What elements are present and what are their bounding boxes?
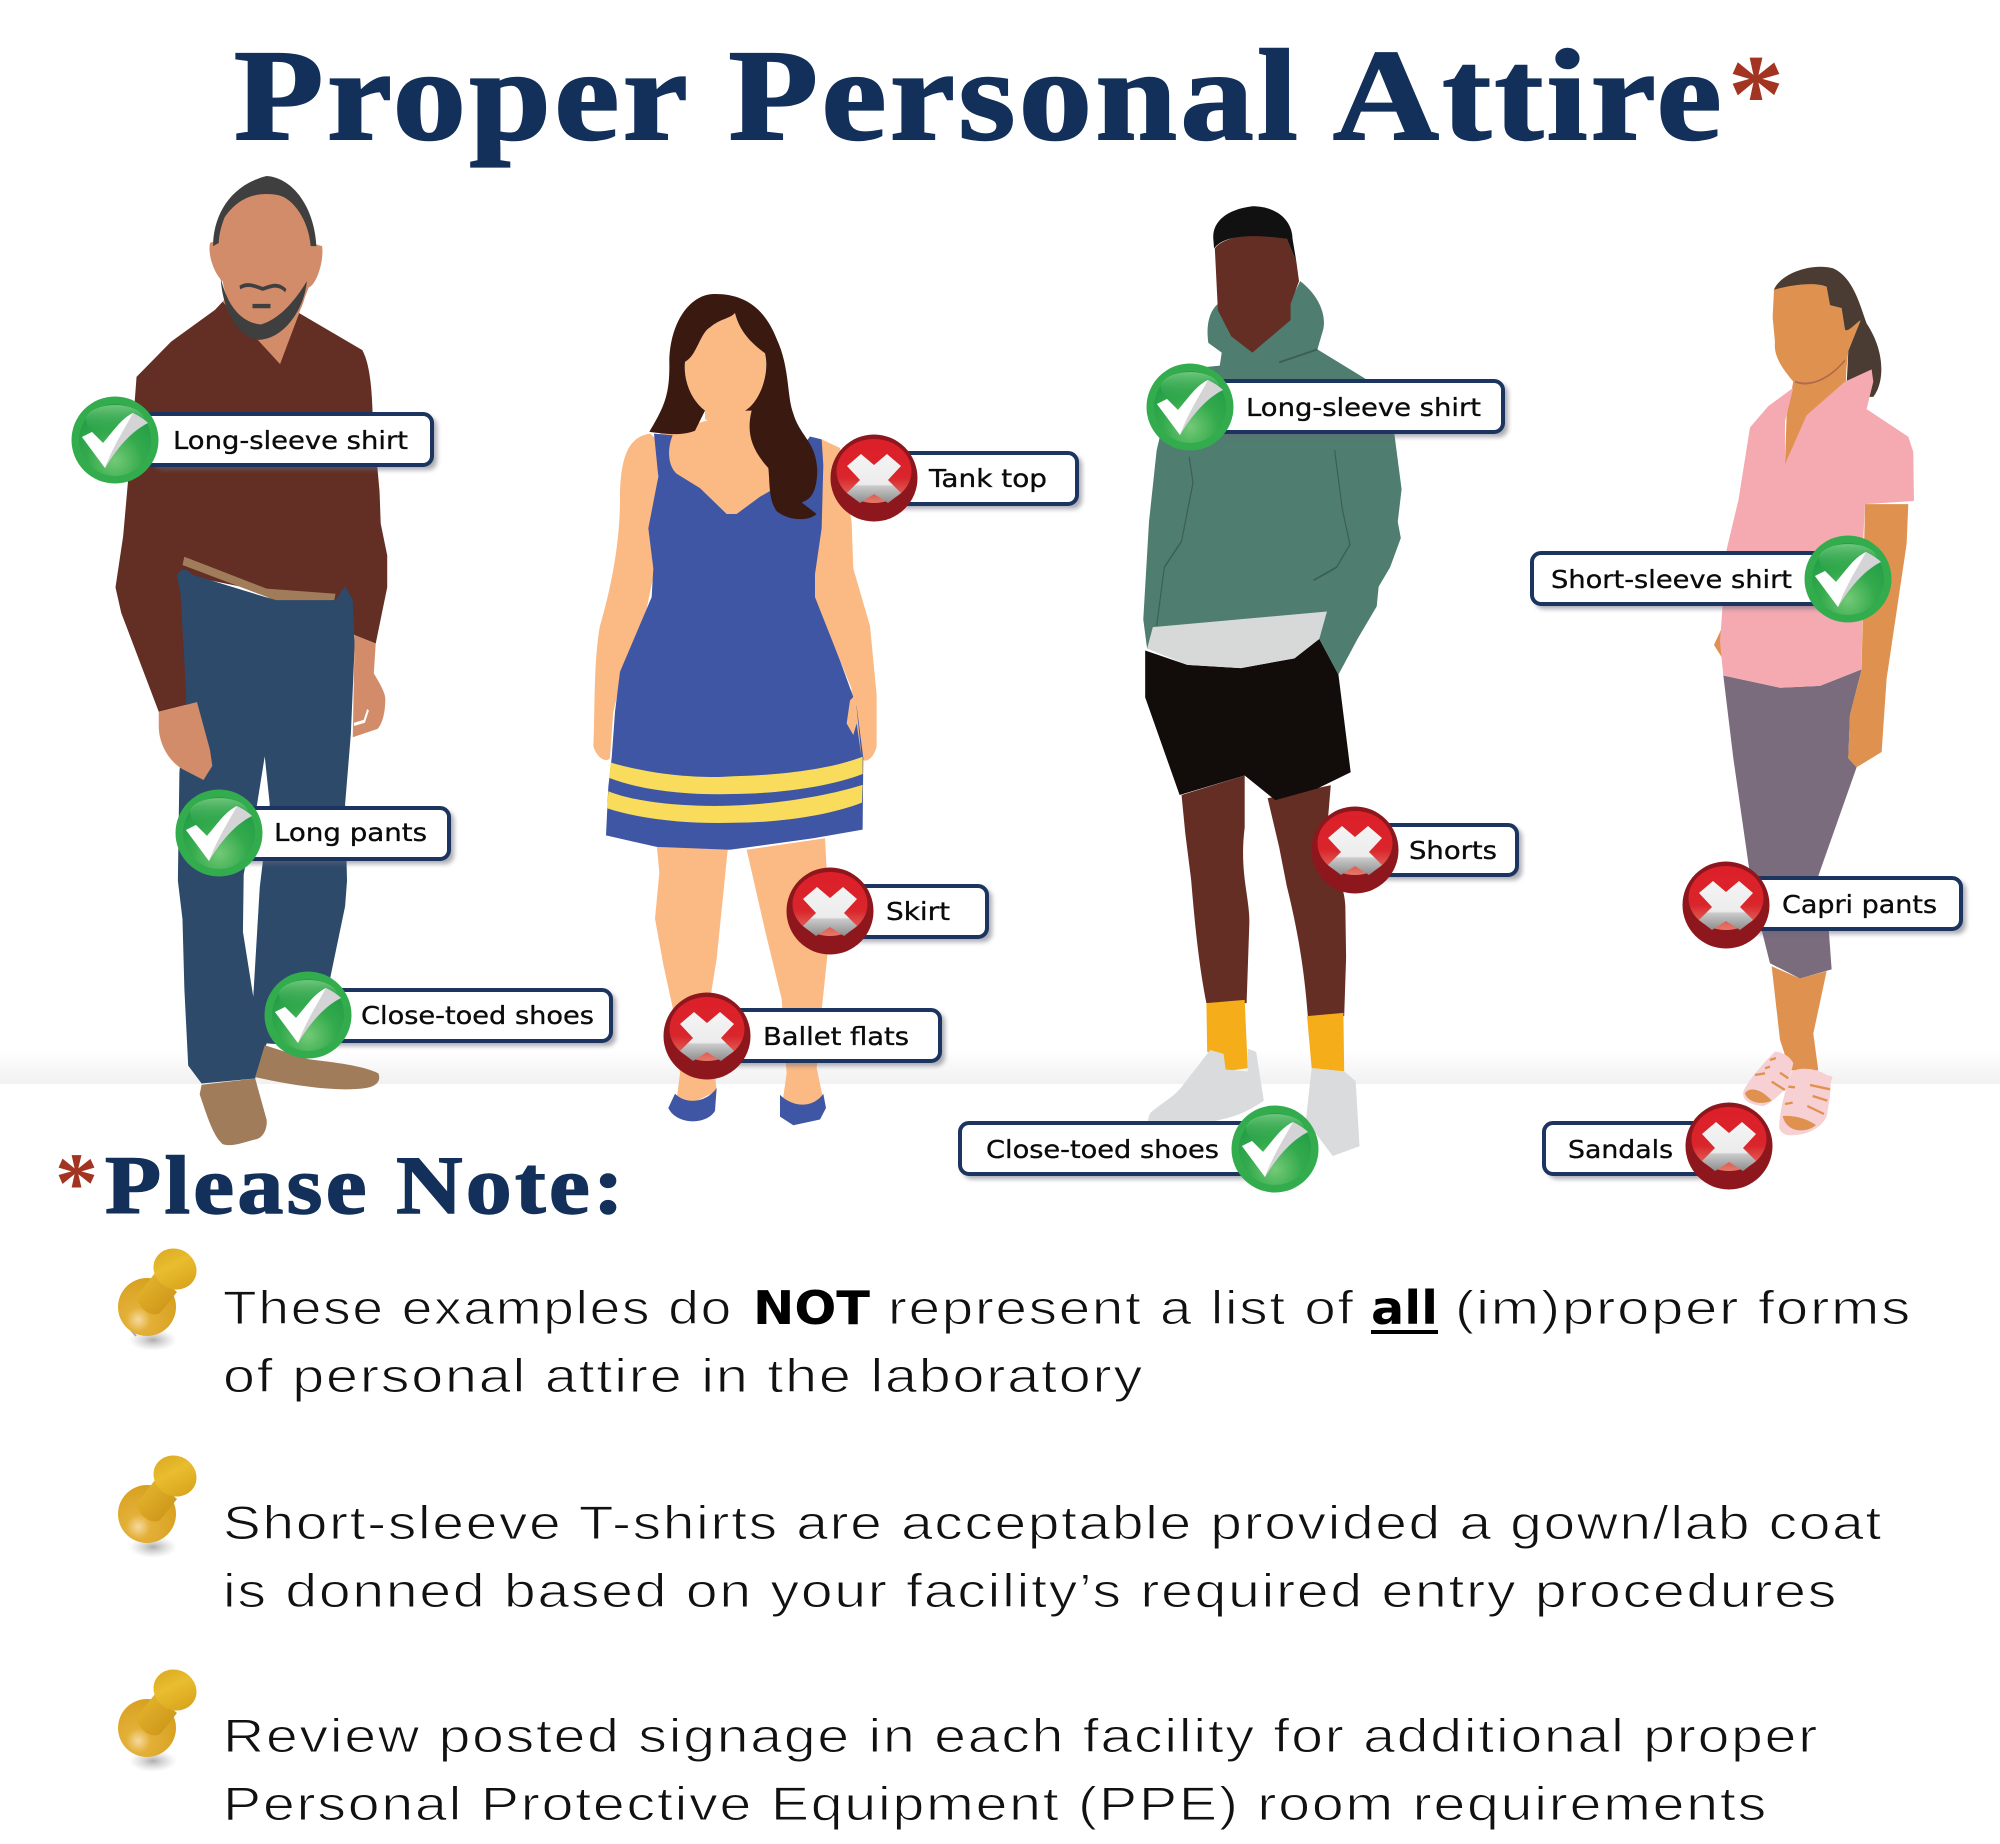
title: Proper Personal Attire bbox=[234, 24, 1725, 168]
label: long pants bbox=[176, 790, 454, 876]
figure: woman in short-sleeve shirt and capri pants bbox=[1714, 267, 1914, 1070]
icon: cross badge bbox=[1312, 806, 1398, 894]
label: capri pants: Capri pants bbox=[1782, 890, 1937, 919]
label: long-sleeve shirt (hoodie) bbox=[1146, 364, 1508, 450]
icon: cross badge bbox=[830, 434, 918, 522]
text block: note 1: all bbox=[1371, 1281, 1438, 1335]
icon: pushpin 2 bbox=[118, 1448, 204, 1558]
label: long pants: Long pants bbox=[274, 818, 427, 847]
label: long-sleeve shirt (man): Long-sleeve shirt bbox=[173, 426, 408, 455]
icon: sandals bbox=[1743, 1052, 1833, 1135]
label: close-toed shoes (hoodie): Close-toed shoes bbox=[986, 1135, 1219, 1164]
text block: note 1: of personal attire in the laboratory bbox=[223, 1349, 1144, 1402]
icon: check badge bbox=[1804, 536, 1892, 622]
label: sandals: Sandals bbox=[1568, 1135, 1673, 1164]
title: * bbox=[1728, 33, 1784, 157]
text block: note 1: represent a list of bbox=[888, 1281, 1355, 1334]
icon: check badge bbox=[1146, 364, 1234, 450]
label: skirt: Skirt bbox=[886, 897, 950, 926]
label: short-sleeve shirt: Short-sleeve shirt bbox=[1551, 565, 1792, 594]
text block: note 1: These examples do bbox=[223, 1281, 733, 1334]
text block: note 2 bbox=[223, 1496, 1883, 1617]
label: short-sleeve shirt bbox=[1532, 536, 1892, 622]
label: ballet flats bbox=[664, 992, 945, 1080]
label: shorts: Shorts bbox=[1409, 836, 1497, 865]
text block: note 3 bbox=[223, 1709, 1819, 1830]
text block: note 1: (im)proper forms bbox=[1455, 1281, 1912, 1334]
heading: please note: * bbox=[55, 1135, 98, 1231]
label: long-sleeve shirt (man) bbox=[72, 396, 437, 484]
label: sandals bbox=[1544, 1102, 1772, 1190]
text block: note 3: Review posted signage in each facility for additional proper bbox=[223, 1709, 1819, 1762]
text block: note 1 bbox=[223, 1281, 1912, 1402]
label: close-toed shoes (man): Close-toed shoes bbox=[361, 1001, 594, 1030]
label: close-toed shoes (hoodie) bbox=[960, 1106, 1318, 1192]
floor band bbox=[0, 1050, 2000, 1084]
icon: check badge bbox=[72, 396, 158, 484]
label: tank top: Tank top bbox=[928, 464, 1047, 493]
label: long-sleeve shirt (hoodie): Long-sleeve shirt bbox=[1246, 393, 1481, 422]
label: tank top bbox=[830, 434, 1082, 522]
icon: pushpin 3 bbox=[118, 1662, 204, 1772]
icon: cross badge bbox=[786, 868, 874, 954]
icon: check badge bbox=[1232, 1106, 1318, 1192]
figure: woman in tank top skirt and ballet flats bbox=[593, 294, 877, 1125]
label: close-toed shoes (man) bbox=[264, 972, 616, 1058]
text block: note 2: Short-sleeve T-shirts are acceptable provided a gown/lab coat bbox=[223, 1496, 1883, 1549]
figure: man in hoodie and shorts bbox=[1143, 206, 1402, 1156]
icon: check badge bbox=[264, 972, 352, 1058]
label: shorts bbox=[1312, 806, 1522, 894]
icon: cross badge bbox=[664, 992, 750, 1080]
icon: cross badge bbox=[1686, 1102, 1772, 1190]
text block: note 3: Personal Protective Equipment (PPE) room requirements bbox=[223, 1777, 1768, 1830]
heading: please note: Please Note: bbox=[105, 1139, 627, 1231]
figure: man in long-sleeve shirt and long pants bbox=[115, 176, 387, 1145]
text block: note 2: is donned based on your facility’s required entry procedures bbox=[223, 1564, 1838, 1617]
label: capri pants bbox=[1682, 862, 1966, 948]
icon: check badge bbox=[176, 790, 262, 876]
icon: cross badge bbox=[1682, 862, 1770, 948]
label: skirt bbox=[786, 868, 992, 954]
icon: pushpin 1 bbox=[118, 1241, 204, 1351]
label: ballet flats: Ballet flats bbox=[763, 1022, 909, 1051]
text block: note 1: NOT bbox=[753, 1281, 871, 1335]
